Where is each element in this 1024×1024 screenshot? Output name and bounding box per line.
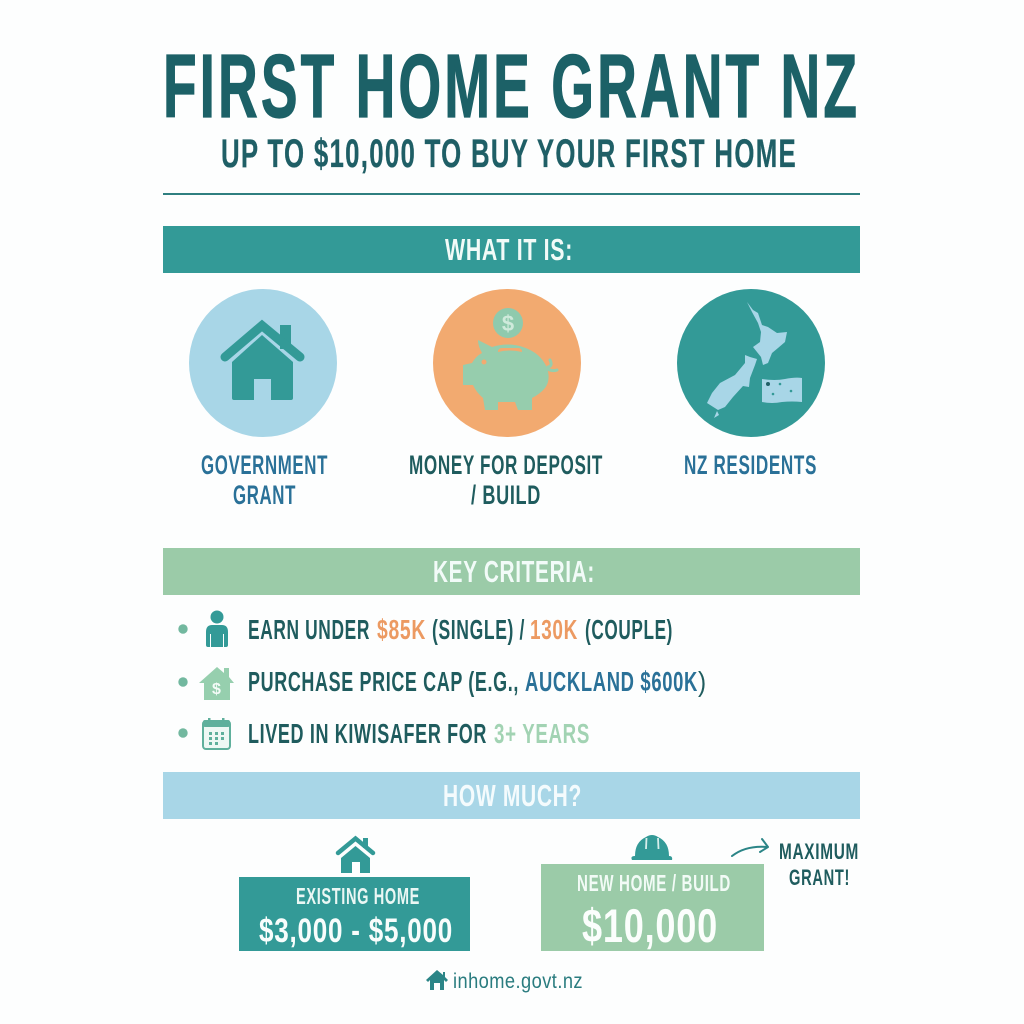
banner: key criteria — [163, 548, 860, 595]
label: government grant: GOVERNMENT — [201, 450, 328, 480]
label: money for deposit / build: MONEY FOR DEPOSIT — [409, 450, 603, 480]
criterion: income: $85K — [377, 614, 426, 645]
icon: hard hat — [631, 835, 672, 860]
label: money for deposit / build — [409, 450, 603, 510]
label: money for deposit / build: / BUILD — [471, 480, 541, 510]
label: NZ residents: NZ RESIDENTS — [684, 450, 817, 480]
banner: what it is: WHAT IT IS: — [445, 232, 573, 267]
panel: key criteria — [163, 548, 860, 749]
criterion: purchase price cap: AUCKLAND $600K — [525, 666, 698, 697]
callout: maximum grant: MAXIMUM — [779, 839, 859, 864]
criterion: income: 130K — [530, 614, 578, 645]
icon: existing home house — [338, 838, 373, 873]
icon: footer house — [426, 970, 448, 990]
icon: house in blue circle — [189, 289, 337, 437]
label: government grant — [201, 450, 328, 510]
criterion: income: EARN UNDER — [248, 614, 370, 645]
banner: what it is — [163, 226, 860, 273]
banner: how much: HOW MUCH? — [443, 778, 582, 813]
criterion: KiwiSaver years: LIVED IN KIWISAFER FOR — [248, 718, 487, 749]
card: existing home: EXISTING HOME — [296, 883, 420, 909]
criterion: income: (SINGLE) / — [432, 614, 525, 645]
card: existing home — [239, 877, 470, 951]
banner: how much — [163, 772, 860, 819]
callout: maximum grant — [779, 839, 859, 890]
criterion: income — [178, 610, 673, 647]
card: new home / build: NEW HOME / BUILD — [577, 870, 731, 896]
icon: New Zealand map and flag in teal circle — [677, 289, 825, 437]
callout: maximum grant: GRANT! — [789, 865, 850, 890]
arrow: to maximum grant — [732, 839, 768, 856]
panel: what it is — [163, 226, 860, 510]
icon: piggy bank with coin in orange circle: $ — [502, 311, 514, 336]
card: new home / build: $10,000 — [582, 899, 718, 952]
label: government grant: GRANT — [233, 480, 296, 510]
criterion: purchase price cap: ) — [698, 666, 707, 697]
criterion: income: (COUPLE) — [585, 614, 673, 645]
footer: website: inhome.govt.nz — [453, 970, 583, 993]
panel: how much — [163, 772, 860, 952]
card: existing home: $3,000 - $5,000 — [259, 912, 453, 950]
criterion: purchase price cap: PURCHASE PRICE CAP (E.G., — [248, 666, 519, 697]
icon: piggy bank with coin in orange circle — [433, 289, 581, 437]
criterion: purchase price cap: $ — [212, 681, 222, 698]
banner: key criteria: KEY CRITERIA: — [433, 554, 595, 589]
card: new home / build — [541, 864, 764, 952]
criterion: KiwiSaver years: 3+ YEARS — [494, 718, 590, 749]
